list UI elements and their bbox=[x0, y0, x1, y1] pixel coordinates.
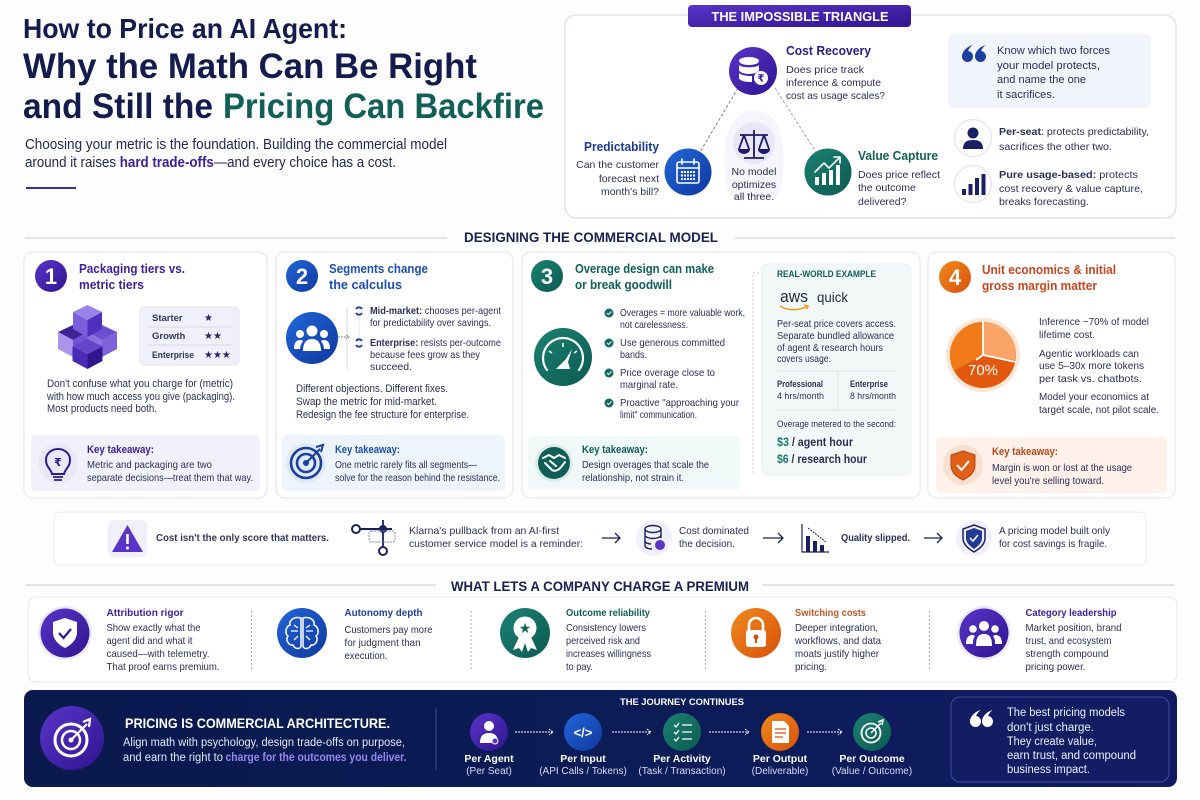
card heading: Packaging tiers vs. bbox=[79, 261, 185, 276]
number 4: 4 bbox=[949, 265, 962, 290]
checklist: Use generous committed bbox=[620, 337, 725, 349]
cost text: Cost dominated bbox=[679, 525, 749, 537]
value capture text: the outcome bbox=[858, 182, 916, 194]
fragile text: for cost savings is fragile. bbox=[999, 538, 1107, 550]
outcome text: Outcome reliability bbox=[566, 607, 650, 619]
segment text bbox=[370, 305, 501, 373]
card body: with how much access you give (packaging). bbox=[46, 391, 235, 403]
pure usage text: Pure usage-based: protects bbox=[999, 169, 1138, 181]
quote box: it sacrifices. bbox=[997, 89, 1055, 101]
key takeaway: level you're selling toward. bbox=[992, 475, 1104, 487]
autonomy text: Autonomy depth bbox=[344, 607, 422, 619]
card heading: metric tiers bbox=[79, 277, 144, 292]
autonomy text: execution. bbox=[344, 650, 388, 662]
journey: per outcome: Per Outcome bbox=[839, 753, 905, 765]
tier table bbox=[140, 307, 239, 365]
triangle connectors bbox=[700, 88, 816, 152]
card body bbox=[1039, 316, 1159, 416]
icon: per-seat bbox=[954, 120, 992, 156]
quote box: and name the one bbox=[997, 74, 1086, 86]
klarna text: customer service model is a reminder: bbox=[409, 538, 583, 550]
journey: per activity: (Task / Transaction) bbox=[638, 766, 726, 777]
icon: attribution shield bbox=[38, 606, 92, 660]
key takeaway bbox=[31, 435, 260, 491]
card heading bbox=[79, 261, 185, 292]
attribution text: Attribution rigor bbox=[106, 607, 184, 619]
outcome text: increases willingness bbox=[566, 648, 651, 660]
icon: shield bbox=[943, 445, 983, 485]
real-world example: of agent & research hours bbox=[777, 342, 883, 354]
number 2 bbox=[286, 260, 318, 292]
per-seat text: sacrifices the other two. bbox=[999, 141, 1112, 153]
arrow bbox=[612, 729, 651, 735]
key takeaway: Metric and packaging are two bbox=[87, 459, 212, 471]
closing message: PRICING IS COMMERCIAL ARCHITECTURE. bbox=[125, 715, 390, 731]
cost text bbox=[679, 525, 749, 550]
icon: declining chart bbox=[802, 524, 829, 552]
card body bbox=[46, 378, 235, 415]
closing message: and earn the right to bbox=[123, 752, 223, 764]
value capture text: delivered? bbox=[858, 196, 907, 208]
panel: klarna strip: Quality slipped. bbox=[841, 533, 910, 544]
segment connector bbox=[338, 307, 362, 370]
journey: per activity: Per Activity bbox=[653, 753, 711, 765]
attribution text: caused—with telemetry. bbox=[106, 648, 210, 660]
arrow bbox=[924, 533, 942, 543]
panel: klarna strip: Cost isn't the only score that matters. bbox=[156, 533, 329, 544]
key takeaway: Key takeaway: bbox=[335, 444, 400, 456]
switching text: Switching costs bbox=[795, 607, 866, 619]
card heading bbox=[982, 262, 1116, 293]
cost recovery text bbox=[786, 43, 885, 102]
tier table: ★★★ bbox=[204, 350, 231, 361]
divider to example bbox=[753, 273, 763, 475]
autonomy text bbox=[344, 607, 433, 662]
segment text: because fees grow as they bbox=[370, 349, 481, 361]
center note bbox=[732, 166, 776, 203]
journey: per output: (Deliverable) bbox=[752, 766, 808, 777]
panel: premium drivers bbox=[28, 597, 1177, 682]
icon: switching lock bbox=[731, 608, 781, 658]
cost recovery text: Does price track bbox=[786, 64, 865, 76]
card body: Most products need both. bbox=[47, 403, 157, 415]
journey: per agent bbox=[464, 713, 514, 777]
center note: optimizes bbox=[732, 179, 776, 191]
outcome text: Consistency lowers bbox=[566, 622, 646, 634]
journey: per activity bbox=[638, 713, 726, 777]
journey: per agent: (Per Seat) bbox=[466, 766, 512, 777]
logo: aws quick: aws bbox=[780, 287, 808, 306]
pure usage text: cost recovery & value capture, bbox=[999, 183, 1143, 195]
real-world example: $3 / agent hour bbox=[777, 435, 853, 449]
subtitle: Choosing your metric is the foundation. Building the commercial model bbox=[25, 136, 447, 153]
icon: warning bbox=[108, 520, 147, 557]
center note: No model bbox=[732, 166, 776, 178]
card body: Inference ~70% of model bbox=[1039, 316, 1149, 328]
closing quote: The best pricing models bbox=[1007, 707, 1125, 719]
fragile text bbox=[999, 525, 1111, 550]
quote box: Know which two forces bbox=[997, 45, 1110, 57]
icon: people bbox=[286, 312, 338, 364]
card body: lifetime cost. bbox=[1039, 329, 1095, 341]
icon: handshake bbox=[535, 444, 573, 482]
real-world example: Overage metered to the second: bbox=[777, 419, 896, 429]
panel: the impossible triangle bbox=[565, 5, 1176, 218]
journey: per outcome bbox=[832, 713, 912, 777]
cost recovery text: inference & compute bbox=[786, 77, 881, 89]
icon: quote mark bbox=[962, 45, 986, 62]
real-world example: Enterprise bbox=[850, 379, 888, 389]
closing quote bbox=[951, 697, 1169, 782]
real-world example: covers usage. bbox=[777, 353, 831, 365]
per-seat text bbox=[999, 126, 1149, 153]
category text: Category leadership bbox=[1026, 607, 1116, 619]
attribution text: agent did and what it bbox=[106, 635, 193, 647]
attribution text: That proof earns premium. bbox=[106, 661, 220, 673]
segment text: succeed. bbox=[370, 361, 412, 373]
journey: per input bbox=[539, 713, 627, 777]
attribution text bbox=[106, 607, 220, 673]
key takeaway bbox=[528, 436, 740, 490]
autonomy text: Customers pay more bbox=[344, 624, 433, 636]
key takeaway: relationship, not strain it. bbox=[582, 472, 684, 484]
pure usage text: breaks forecasting. bbox=[999, 196, 1089, 208]
key takeaway bbox=[936, 437, 1167, 493]
card body: per task vs. chatbots. bbox=[1039, 373, 1142, 385]
closing message: charge for the outcomes you deliver. bbox=[226, 752, 406, 764]
number 1: 1 bbox=[45, 264, 57, 289]
predictability text: month's bill? bbox=[601, 186, 659, 198]
number 2: 2 bbox=[296, 264, 308, 289]
category text: strength compound bbox=[1026, 648, 1109, 660]
closing message bbox=[123, 715, 406, 764]
icon: usage bars bbox=[954, 166, 992, 202]
journey: per output: Per Output bbox=[753, 753, 808, 765]
card body: target scale, not pilot scale. bbox=[1039, 404, 1159, 416]
outcome text: perceived risk and bbox=[566, 635, 640, 647]
icon: center scale bbox=[724, 110, 784, 198]
category text: Market position, brand bbox=[1026, 622, 1122, 634]
category text bbox=[1026, 607, 1122, 673]
icon: target bbox=[286, 443, 326, 483]
icon: workflow bbox=[352, 520, 395, 555]
icon: category people bbox=[957, 606, 1011, 660]
segment text: Mid-market: chooses per-agent bbox=[370, 305, 501, 317]
value capture text: Does price reflect bbox=[858, 169, 940, 181]
journey: per output bbox=[752, 713, 808, 777]
category text: pricing power. bbox=[1026, 661, 1086, 673]
logo: aws quick: quick bbox=[817, 289, 849, 305]
closing quote: don't just charge. bbox=[1007, 722, 1094, 734]
key takeaway: Key takeaway: bbox=[992, 446, 1058, 458]
icon: bulb bbox=[38, 443, 78, 483]
tier table: ★ bbox=[204, 313, 213, 324]
key takeaway: Key takeaway: bbox=[582, 444, 648, 456]
cost text: the decision. bbox=[679, 538, 735, 550]
icon: cost recovery bbox=[729, 47, 777, 95]
predictability text: forecast next bbox=[599, 173, 659, 185]
real-world example bbox=[762, 264, 911, 475]
panel: klarna strip bbox=[54, 512, 1146, 565]
tier table: Enterprise bbox=[152, 350, 194, 361]
tier table: ★★ bbox=[204, 331, 222, 342]
checklist: Proactive "approaching your bbox=[620, 397, 739, 409]
number 3 bbox=[531, 260, 563, 292]
category text: trust, and ecosystem bbox=[1026, 635, 1112, 647]
subtitle: around it raises hard trade-offs—and every choice has a cost. bbox=[25, 154, 396, 171]
real-world example: 8 hrs/month bbox=[850, 391, 896, 401]
arrow bbox=[763, 533, 783, 543]
icon: quote mark bbox=[970, 710, 993, 727]
icon: bulb: ₹ bbox=[54, 457, 62, 469]
card heading bbox=[575, 261, 714, 292]
icon: outcome badge: ★ bbox=[519, 620, 531, 636]
predictability text: Can the customer bbox=[576, 159, 660, 171]
real-world example: Separate bundled allowance bbox=[777, 330, 894, 342]
card body: use 5–30x more tokens bbox=[1039, 360, 1144, 372]
checklist bbox=[604, 307, 745, 421]
klarna text bbox=[409, 525, 583, 550]
value capture text: Value Capture bbox=[858, 148, 938, 163]
card heading: the calculus bbox=[329, 277, 402, 292]
icon: fragile shield bbox=[956, 520, 992, 556]
per-seat text: Per-seat: protects predictability, bbox=[999, 126, 1149, 138]
icon: cost recovery: ₹ bbox=[758, 74, 765, 84]
heading pill: THE IMPOSSIBLE TRIANGLE bbox=[712, 9, 889, 24]
icon: gauge bbox=[534, 328, 592, 386]
journey: per outcome: (Value / Outcome) bbox=[832, 766, 912, 777]
card body: Different objections. Different fixes. bbox=[296, 383, 448, 395]
panel: card 3 overage design bbox=[522, 252, 920, 498]
key takeaway: separate decisions—treat them that way. bbox=[87, 472, 253, 484]
closing message: Align math with psychology, design trade-offs on purpose, bbox=[123, 737, 405, 749]
arrow bbox=[602, 533, 620, 543]
title: and Still the bbox=[23, 86, 213, 126]
key takeaway: One metric rarely fits all segments— bbox=[335, 459, 477, 471]
switching text: workflows, and data bbox=[794, 635, 881, 647]
icon: cost database bbox=[636, 520, 672, 556]
checklist: Overages = more valuable work, bbox=[620, 307, 745, 319]
heading pill bbox=[688, 5, 911, 27]
section heading: designing the commercial model: DESIGNING THE COMMERCIAL MODEL bbox=[464, 230, 718, 245]
predictability text: Predictability bbox=[584, 139, 660, 154]
card body: Redesign the fee structure for enterprise. bbox=[296, 409, 469, 421]
checklist: not carelessness. bbox=[620, 319, 688, 331]
icon: calendar bbox=[664, 148, 712, 196]
checklist: marginal rate. bbox=[620, 379, 678, 391]
card body: Swap the metric for mid-market. bbox=[296, 396, 437, 408]
segment text: Enterprise: resists per-outcome bbox=[370, 337, 501, 349]
title: Pricing Can Backfire bbox=[223, 86, 544, 126]
tier table: Growth bbox=[152, 331, 185, 342]
tier table: Starter bbox=[152, 313, 183, 324]
switching text: moats justify higher bbox=[795, 648, 879, 660]
title: How to Price an AI Agent: bbox=[23, 13, 347, 44]
title: Why the Math Can Be Right bbox=[23, 46, 477, 86]
icon: target bbox=[40, 706, 104, 770]
quote box bbox=[948, 34, 1151, 108]
number 3: 3 bbox=[541, 264, 553, 289]
subtitle bbox=[25, 136, 447, 171]
real-world example: Professional bbox=[777, 379, 823, 389]
icon: stacked cubes bbox=[58, 305, 117, 369]
icon: autonomy brain bbox=[277, 608, 327, 658]
arrow bbox=[807, 729, 842, 735]
icon: outcome badge bbox=[500, 608, 550, 658]
value capture text bbox=[858, 148, 940, 208]
panel: card 2 segments bbox=[276, 252, 513, 498]
klarna text: Klarna's pullback from an AI-first bbox=[409, 525, 559, 537]
card heading: Unit economics & initial bbox=[982, 262, 1116, 277]
real-world example: REAL-WORLD EXAMPLE bbox=[777, 269, 876, 279]
switching text: pricing. bbox=[795, 661, 827, 673]
pie chart: 70%: 70% bbox=[968, 362, 998, 379]
key takeaway: solve for the reason behind the resistance. bbox=[335, 472, 500, 484]
card body: Don't confuse what you charge for (metric) bbox=[47, 378, 233, 390]
card heading: or break goodwill bbox=[575, 277, 672, 292]
real-world example: 4 hrs/month bbox=[777, 391, 824, 401]
card heading: Segments change bbox=[329, 261, 428, 276]
cost recovery text: Cost Recovery bbox=[786, 43, 872, 58]
number 1 bbox=[35, 260, 67, 292]
real-world example: Per-seat price covers access. bbox=[777, 318, 896, 330]
segment text: for predictability over savings. bbox=[370, 317, 491, 329]
center note: all three. bbox=[734, 191, 774, 203]
icon: value capture bbox=[804, 148, 852, 196]
panel: closing banner bbox=[24, 690, 1177, 787]
fragile text: A pricing model built only bbox=[999, 525, 1111, 537]
closing quote: They create value, bbox=[1007, 736, 1097, 748]
journey: per input: (API Calls / Tokens) bbox=[539, 766, 627, 777]
title bbox=[23, 13, 544, 126]
real-world example: $6 / research hour bbox=[777, 452, 867, 466]
predictability text bbox=[576, 139, 660, 198]
key takeaway: Key takeaway: bbox=[87, 444, 154, 456]
outcome text bbox=[566, 607, 651, 673]
number 4 bbox=[939, 261, 971, 293]
card body: Model your economics at bbox=[1039, 391, 1149, 403]
checklist: Price overage close to bbox=[620, 367, 715, 379]
cost recovery text: cost as usage scales? bbox=[786, 90, 885, 102]
attribution text: Show exactly what the bbox=[106, 622, 201, 634]
checklist: bands. bbox=[620, 349, 647, 361]
switching text bbox=[794, 607, 881, 673]
pure usage text bbox=[999, 169, 1143, 208]
logo: aws quick bbox=[780, 287, 849, 310]
panel: card 4 unit economics bbox=[928, 252, 1175, 498]
key takeaway: Design overages that scale the bbox=[582, 459, 709, 471]
journey: per input: Per Input bbox=[560, 753, 606, 765]
card heading: Overage design can make bbox=[575, 261, 714, 276]
checklist: limit" communication. bbox=[620, 409, 697, 421]
journey: per agent: Per Agent bbox=[464, 753, 514, 765]
key takeaway bbox=[282, 435, 505, 491]
journey: per input: </> bbox=[574, 725, 593, 740]
card heading bbox=[329, 261, 428, 292]
section heading: premium: WHAT LETS A COMPANY CHARGE A PREMIUM bbox=[451, 579, 749, 594]
card body: Agentic workloads can bbox=[1039, 348, 1139, 360]
closing quote: earn trust, and compound bbox=[1007, 750, 1136, 762]
key takeaway: Margin is won or lost at the usage bbox=[992, 462, 1132, 474]
panel: card 1 packaging tiers bbox=[24, 252, 267, 498]
closing quote: business impact. bbox=[1007, 764, 1090, 776]
journey heading: THE JOURNEY CONTINUES bbox=[620, 697, 744, 708]
arrow bbox=[709, 729, 749, 735]
outcome text: to pay. bbox=[566, 661, 593, 673]
card body bbox=[296, 383, 469, 421]
quote box: your model protects, bbox=[997, 60, 1100, 72]
autonomy text: for judgment than bbox=[344, 637, 421, 649]
arrow bbox=[515, 729, 553, 735]
pie chart: 70% bbox=[946, 318, 1020, 392]
switching text: Deeper integration, bbox=[795, 622, 878, 634]
card heading: gross margin matter bbox=[982, 278, 1097, 293]
